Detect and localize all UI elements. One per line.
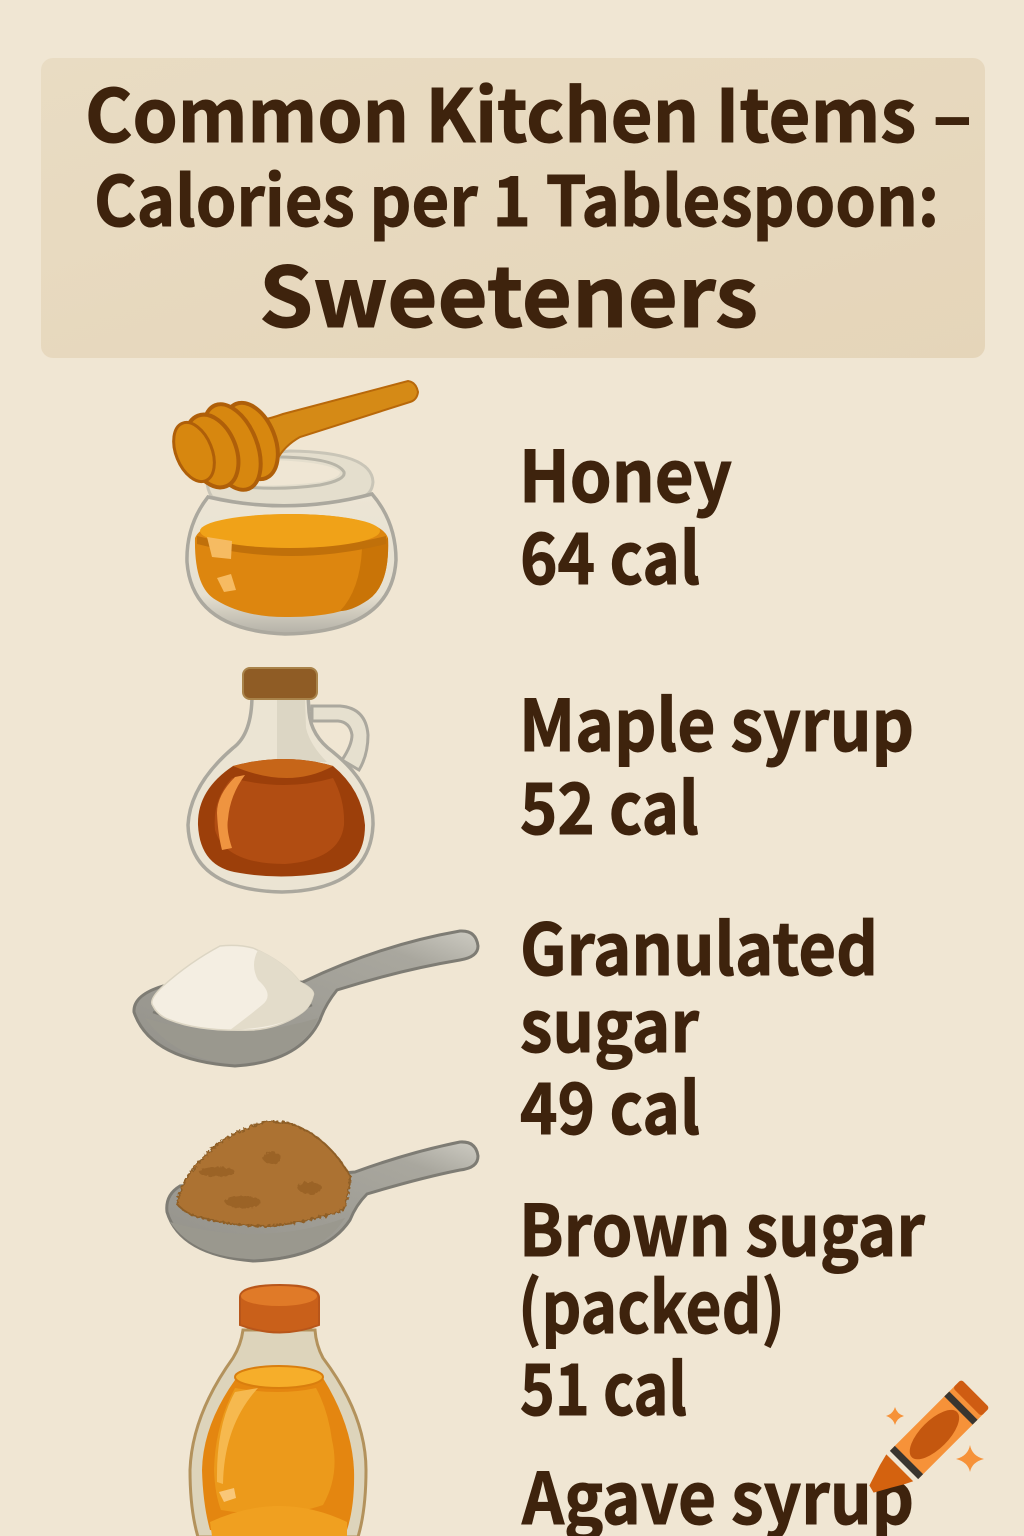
icon: spoon of brown sugar [167, 1122, 478, 1261]
bottle handle [312, 706, 368, 770]
label: Maple syrup: Maple syrup [519, 670, 914, 772]
label: Granulated sugar: sugar [520, 971, 700, 1073]
label: Brown sugar (packed) [518, 1175, 926, 1436]
jar lid [207, 451, 373, 506]
icon: honey jar with dipper [166, 381, 418, 634]
spoon [167, 1142, 478, 1261]
sugar mound [152, 945, 313, 1030]
subtitle: Sweeteners: Sweeteners [259, 231, 758, 351]
icon: spoon of granulated sugar [134, 931, 478, 1066]
bottle glass [188, 695, 373, 892]
sparkle small [886, 1407, 904, 1425]
label: Granulated sugar: Granulated [520, 894, 878, 996]
title line 1: Common Kitchen Items – [85, 58, 972, 164]
bottle cork [240, 1285, 319, 1332]
label: Maple syrup: 52 cal [520, 753, 699, 855]
agave syrup [202, 1366, 354, 1536]
label: Brown sugar (packed): 51 cal [520, 1334, 687, 1436]
sparkle large [956, 1445, 984, 1472]
icon: maple syrup bottle [188, 668, 373, 892]
title panel [41, 58, 985, 358]
title line 2: Calories per 1 Tablespoon: [94, 146, 939, 246]
label: Granulated sugar: 49 cal [520, 1053, 700, 1155]
label: Granulated sugar [520, 894, 878, 1155]
label: Maple syrup [519, 670, 914, 855]
label: Honey: Honey [519, 421, 732, 523]
label: Honey: 64 cal [520, 503, 700, 605]
icon: crayon with sparkles [861, 1379, 990, 1508]
syrup [198, 759, 365, 876]
spoon [134, 931, 478, 1066]
icon: agave syrup bottle [190, 1285, 366, 1536]
label: Brown sugar (packed): Brown sugar [519, 1175, 926, 1277]
label: Brown sugar (packed): (packed) [518, 1252, 785, 1354]
brown sugar pile [177, 1122, 350, 1226]
jar body [187, 494, 396, 634]
bottle glass [190, 1330, 366, 1536]
honey [195, 514, 388, 617]
honey dipper [166, 381, 418, 498]
label: Honey [519, 421, 732, 605]
bottle cap [243, 668, 317, 699]
